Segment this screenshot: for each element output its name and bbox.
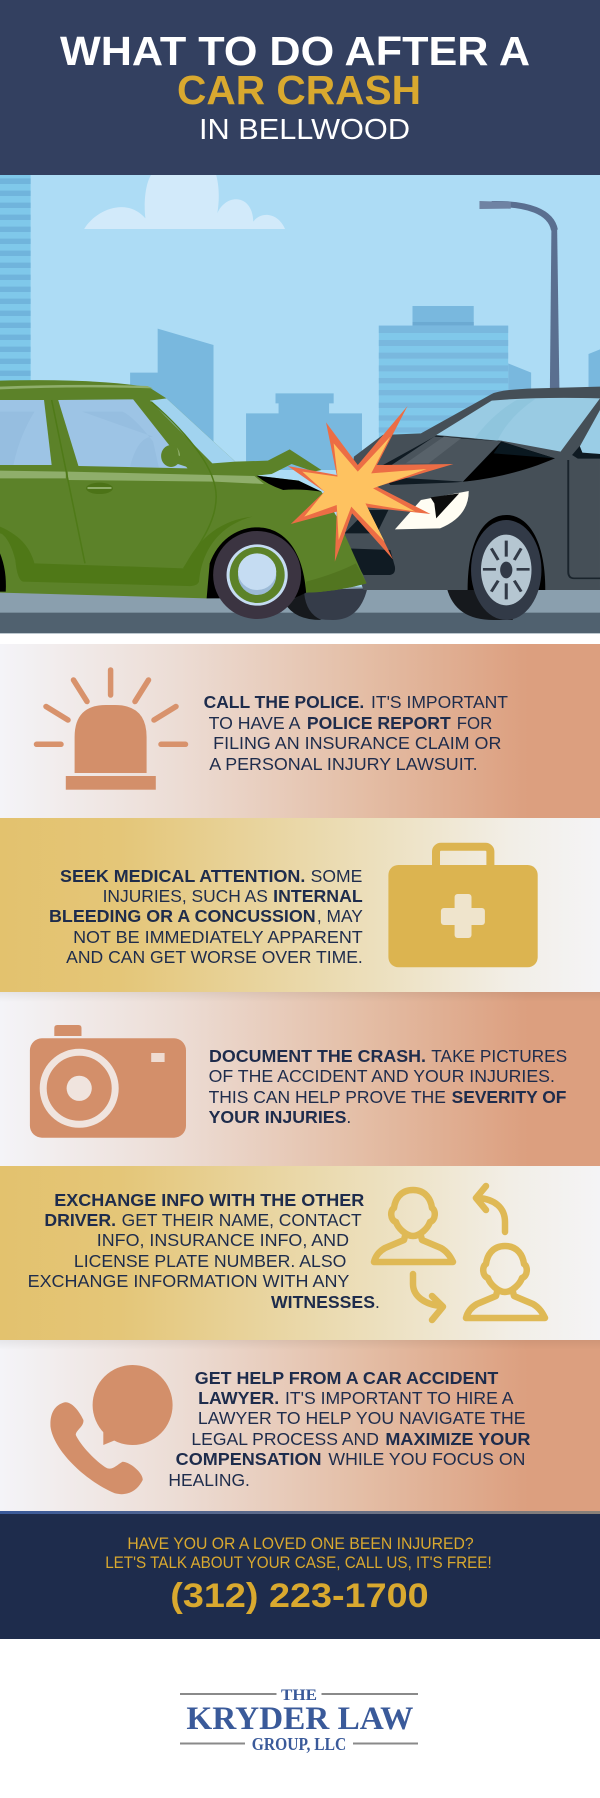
text: exchange info: LICENSE PLATE NUMBER. ALSO [74, 1251, 346, 1271]
text: seek medical attention: INJURIES, SUCH AS [103, 886, 268, 906]
text: get help from a lawyer: LAWYER TO HELP YOU NAVIGATE THE [198, 1408, 526, 1428]
text: document the crash: DOCUMENT THE CRASH. [209, 1046, 426, 1066]
hero illustration: two cars colliding in a city [0, 175, 600, 633]
text: exchange info: INFO, INSURANCE INFO, AND [97, 1230, 349, 1250]
text: get help from a lawyer: IT'S IMPORTANT TO HIRE A [285, 1388, 514, 1408]
text: document the crash: OF THE ACCIDENT AND YOUR INJURIES. [209, 1066, 555, 1086]
text: document the crash: . [346, 1107, 351, 1127]
logo: the kryder law group: THE [281, 1687, 317, 1704]
text: seek medical attention: INTERNAL [273, 886, 363, 906]
building: left striped tower [0, 175, 31, 383]
text: call the police [204, 692, 508, 774]
text: seek medical attention: BLEEDING OR A CONCUSSION [49, 906, 316, 926]
text: get help from a lawyer: GET HELP FROM A CAR ACCIDENT [195, 1368, 499, 1388]
green car [0, 380, 367, 619]
text: seek medical attention: AND CAN GET WORSE OVER TIME. [66, 947, 363, 967]
panel: document the crash [0, 992, 600, 1166]
text: get help from a lawyer: COMPENSATION [176, 1449, 322, 1469]
title line: what to do after a: WHAT TO DO AFTER A [60, 28, 530, 74]
panel: exchange info [0, 1166, 600, 1340]
call to action text: HAVE YOU OR A LOVED ONE BEEN INJURED? [127, 1534, 474, 1553]
text: get help from a lawyer: HEALING. [168, 1470, 250, 1490]
text: call the police: IT'S IMPORTANT [371, 692, 508, 712]
text: exchange info: DRIVER. [44, 1210, 116, 1230]
panel: get help from a lawyer [0, 1340, 600, 1512]
panel: call the police [0, 644, 600, 818]
text: document the crash [209, 1046, 567, 1127]
panel: seek medical attention [0, 818, 600, 992]
cloud [84, 175, 285, 229]
text: call the police: POLICE REPORT [307, 713, 451, 733]
logo: the kryder law group [180, 1687, 418, 1754]
footer call to action [0, 1511, 600, 1639]
phone number: (312) 223-1700 [170, 1577, 429, 1615]
text: get help from a lawyer [168, 1368, 531, 1490]
icon: first aid kit [388, 847, 538, 967]
text: get help from a lawyer: WHILE YOU FOCUS ON [328, 1449, 525, 1469]
text: exchange info: EXCHANGE INFO WITH THE OTHER [54, 1190, 365, 1210]
text: exchange info: . [375, 1292, 380, 1312]
icon: camera [30, 1025, 186, 1138]
text: document the crash: SEVERITY OF [452, 1087, 566, 1107]
subtitle: in bellwood: IN BELLWOOD [199, 114, 410, 146]
text: seek medical attention: SEEK MEDICAL ATTENTION. [60, 866, 305, 886]
text: call the police: FOR [457, 713, 492, 733]
text: seek medical attention: NOT BE IMMEDIATELY APPARENT [73, 927, 363, 947]
header panel [0, 0, 600, 175]
title line: car crash: CAR CRASH [177, 67, 421, 113]
skyline buildings [130, 306, 600, 470]
text: seek medical attention: , MAY [317, 906, 363, 926]
logo: the kryder law group: GROUP, LLC [252, 1734, 346, 1754]
text: exchange info [28, 1190, 380, 1312]
text: call the police: FILING AN INSURANCE CLAIM OR [213, 733, 501, 753]
text: seek medical attention [49, 866, 363, 967]
text: document the crash: THIS CAN HELP PROVE THE [209, 1087, 446, 1107]
text: seek medical attention: SOME [311, 866, 362, 886]
road [0, 587, 600, 633]
text: exchange info: WITNESSES [271, 1292, 375, 1312]
text: get help from a lawyer: MAXIMIZE YOUR [385, 1429, 531, 1449]
icon: two people exchanging [374, 1186, 545, 1320]
text: exchange info: GET THEIR NAME, CONTACT [122, 1210, 362, 1230]
text: document the crash: TAKE PICTURES [431, 1046, 567, 1066]
call to action text [105, 1534, 492, 1572]
text: exchange info: EXCHANGE INFORMATION WITH ANY [28, 1271, 350, 1291]
collision starburst [288, 406, 453, 562]
text: get help from a lawyer: LAWYER. [198, 1388, 279, 1408]
icon: police siren [36, 670, 186, 790]
white gap below hero [0, 634, 600, 644]
logo: the kryder law group: KRYDER LAW [186, 1701, 413, 1737]
dark car [285, 387, 600, 620]
text: document the crash: YOUR INJURIES [209, 1107, 346, 1127]
street lamp [479, 201, 559, 392]
text: call the police: TO HAVE A [209, 713, 301, 733]
text: call the police: CALL THE POLICE. [204, 692, 364, 712]
icon: phone and speech bubble [50, 1365, 173, 1494]
text: call the police: A PERSONAL INJURY LAWSUIT. [209, 754, 478, 774]
call to action text: LET'S TALK ABOUT YOUR CASE, CALL US, IT'S FREE! [105, 1553, 492, 1572]
text: get help from a lawyer: LEGAL PROCESS AND [191, 1429, 379, 1449]
